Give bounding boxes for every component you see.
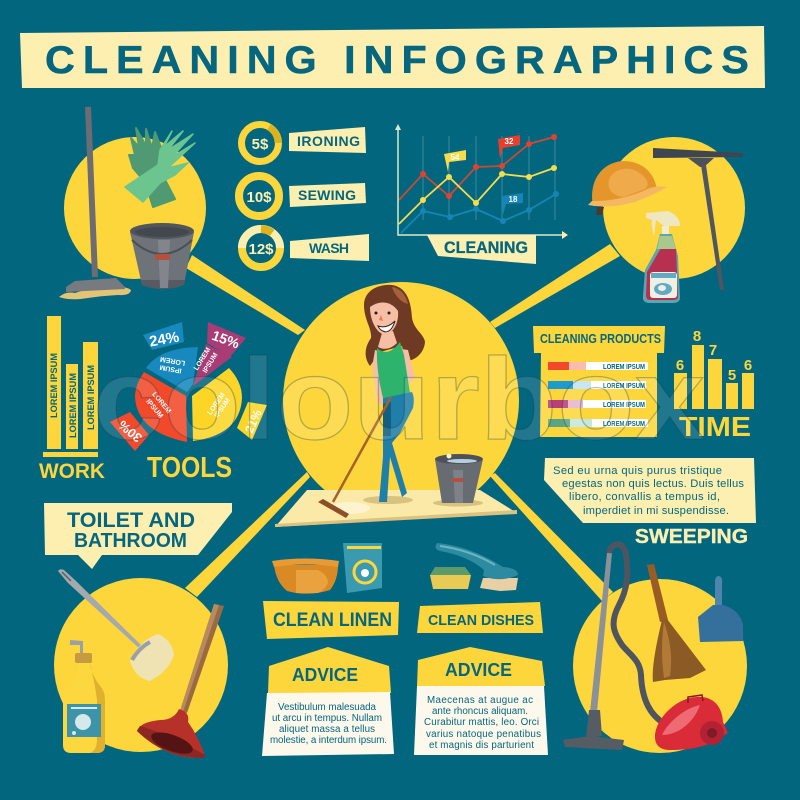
panel: toilet tools xyxy=(54,569,228,758)
price: wash: 12$ xyxy=(248,241,274,258)
price: wash xyxy=(242,229,369,267)
price: ironing xyxy=(242,124,366,162)
icon: spray bottle xyxy=(643,211,680,303)
icon: mop xyxy=(59,107,131,299)
bar chart: time: 8 xyxy=(693,328,701,345)
bar chart: work: LOREM IPSUM xyxy=(49,353,60,418)
row 4: LOREM IPSUM xyxy=(603,421,645,428)
price: sewing: SEWING xyxy=(298,187,356,203)
label: clean linen xyxy=(263,601,399,639)
icon: vacuum cleaner xyxy=(563,544,728,750)
panel: advice right xyxy=(414,647,548,755)
title banner xyxy=(20,26,765,88)
panel: advice left: Vestibulum malesuada xyxy=(278,702,377,713)
icon: floor mop xyxy=(318,397,391,518)
pie chart: tools: LOREM xyxy=(207,392,227,417)
row 2: LOREM IPSUM xyxy=(603,383,645,390)
line chart: cleaning xyxy=(395,124,568,264)
pie chart: tools: 30% xyxy=(115,417,145,446)
bar chart: work xyxy=(39,316,105,483)
price: wash: WASH xyxy=(309,240,349,256)
pie chart: tools: 21% xyxy=(242,407,265,435)
callout: toilet and bathroom xyxy=(44,503,232,569)
bar chart: time: TIME xyxy=(679,411,751,442)
price: ironing: IRONING xyxy=(297,133,360,149)
panel: advice right: varius natoque penatibus xyxy=(426,729,541,740)
icon: soap bottle xyxy=(63,640,105,753)
connector beams xyxy=(185,244,620,601)
panel: advice left xyxy=(262,647,394,756)
pie chart: tools: LOREM xyxy=(193,346,212,372)
title banner: CLEANING INFOGRAPHICS xyxy=(45,38,749,82)
pie chart: tools: IPSUM xyxy=(159,363,182,374)
icon: rubber gloves xyxy=(125,128,195,207)
pie chart: tools: IPSUM xyxy=(214,397,232,419)
text block: sweeping: egestas non quis lectus. Duis tellus xyxy=(562,478,744,490)
pie chart: tools: TOOLS xyxy=(147,452,232,484)
bar chart: time: 6 xyxy=(744,357,752,374)
icon: plunger xyxy=(137,604,224,758)
heading: sweeping: SWEEPING xyxy=(635,526,748,548)
bar chart: time: 5 xyxy=(728,367,736,384)
pie chart: tools xyxy=(110,322,267,484)
panel: sweeping tools xyxy=(563,544,747,753)
bar chart: work: LOREM IPSUM xyxy=(86,365,97,430)
watermark: colourbox xyxy=(93,334,705,464)
pie chart: tools: IPSUM xyxy=(144,398,164,420)
panel: advice right: Maecenas at augue ac xyxy=(427,695,533,706)
price: ironing: 5$ xyxy=(252,136,269,153)
price: sewing: 10$ xyxy=(246,189,272,206)
text block: sweeping: libero, convallis a tempus id, xyxy=(569,491,720,503)
line chart: cleaning: 18 xyxy=(509,195,518,204)
icon: dustpan xyxy=(698,576,743,642)
callout: toilet and bathroom: TOILET AND xyxy=(67,509,195,532)
panel: advice left: ut arcu in tempus. Nullam xyxy=(272,713,382,724)
icon: hard hat xyxy=(588,161,667,215)
text block: sweeping xyxy=(544,458,756,523)
row 1: LOREM IPSUM xyxy=(603,364,645,371)
icon: dish brush xyxy=(436,543,518,591)
floor xyxy=(275,490,517,527)
figure: woman xyxy=(364,285,425,502)
panel: advice left: aliquet massa a tellus xyxy=(279,724,375,735)
line chart: cleaning: 32 xyxy=(505,137,514,146)
bar chart: work: LOREM IPSUM xyxy=(68,373,79,438)
panel: tools top right xyxy=(588,137,745,303)
text block: sweeping: Sed eu urna quis purus tristique xyxy=(553,465,722,477)
pie chart: tools: 15% xyxy=(210,327,242,352)
panel: tools top left xyxy=(59,107,206,299)
bar chart: time: 7 xyxy=(709,342,717,359)
row 3: LOREM IPSUM xyxy=(603,402,645,409)
pie chart: tools: LOREM xyxy=(160,355,186,366)
icon: wash basin xyxy=(272,558,339,594)
icon: sponge xyxy=(430,567,471,589)
icon: bucket xyxy=(130,223,194,289)
label: clean dishes xyxy=(417,602,543,633)
line chart: cleaning: CLEANING xyxy=(444,238,528,257)
panel: cleaning products: CLEANING PRODUCTS xyxy=(540,331,661,346)
panel: advice left: ADVICE xyxy=(292,665,358,685)
icon: detergent box xyxy=(343,543,382,593)
bar chart: time: 6 xyxy=(676,357,684,374)
bar chart: work: WORK xyxy=(39,460,105,483)
pie chart: tools: 24% xyxy=(148,329,180,351)
panel: advice right: ante rhoncus aliquam. xyxy=(432,706,528,717)
label: clean dishes: CLEAN DISHES xyxy=(428,612,534,629)
panel: advice right: et magnis dis parturient xyxy=(429,740,534,751)
icon: broom xyxy=(647,564,706,682)
panel: advice left: molestie, a interdum ipsum. xyxy=(270,735,387,746)
icon: water bucket xyxy=(435,454,483,503)
price: sewing xyxy=(239,176,366,216)
line chart: cleaning: 54 xyxy=(451,153,460,162)
panel: cleaning products xyxy=(533,326,665,437)
pie chart: tools: IPSUM xyxy=(202,352,220,374)
bar chart: time xyxy=(674,328,754,442)
label: clean linen: CLEAN LINEN xyxy=(273,610,392,631)
panel: advice right: ADVICE xyxy=(445,660,512,680)
icon: toilet brush xyxy=(58,569,174,681)
callout: toilet and bathroom: BATHROOM xyxy=(74,530,187,552)
panel: advice right: Curabitur mattis, leo. Orci xyxy=(424,717,539,728)
pie chart: tools: LOREM xyxy=(150,391,172,415)
icon: squeegee xyxy=(653,148,743,290)
panel: center woman mopping xyxy=(275,282,519,527)
text block: sweeping: imperdiet in mi suspendisse. xyxy=(583,505,729,517)
